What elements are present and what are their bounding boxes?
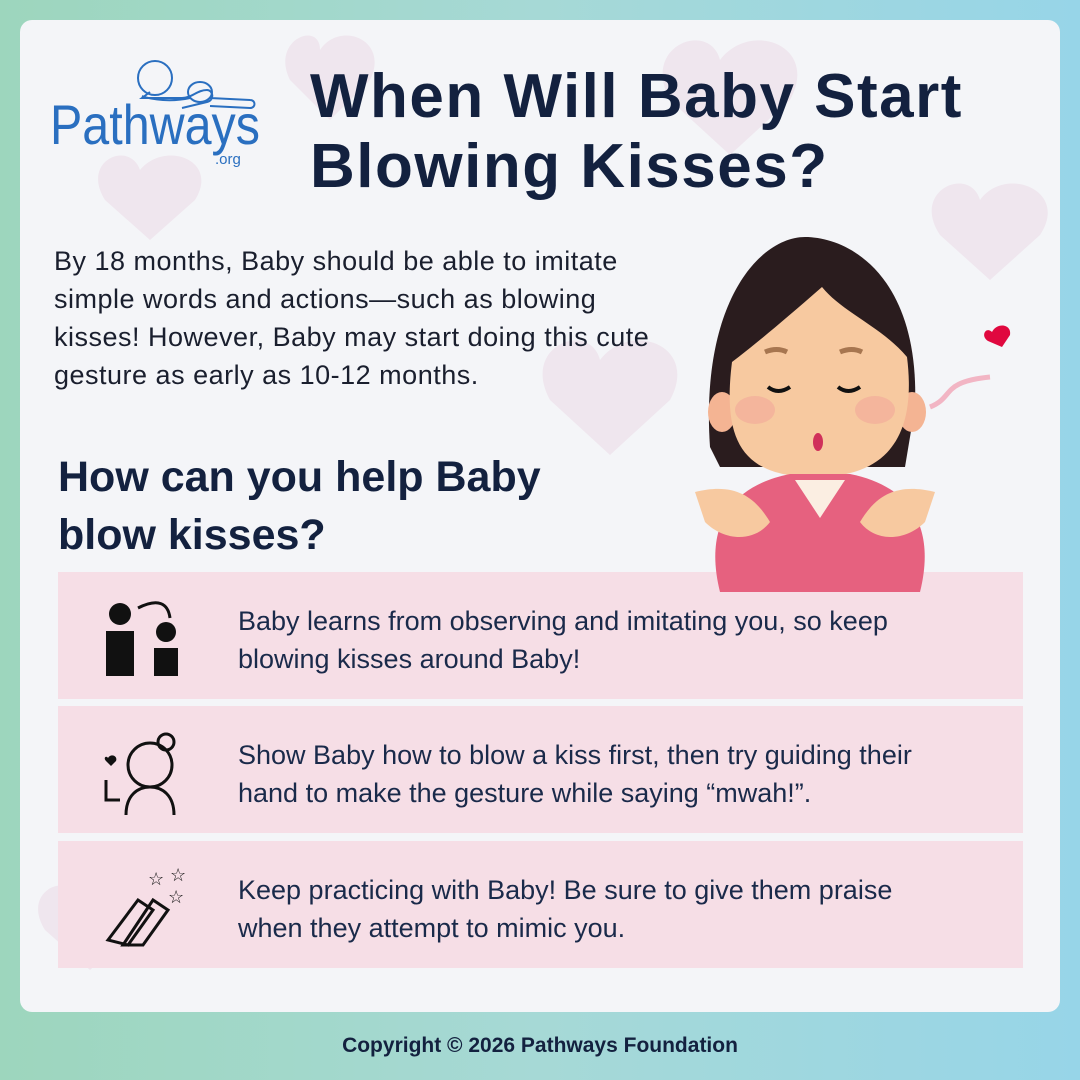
logo: Pathways.org bbox=[50, 60, 260, 168]
icon: imitation people bbox=[106, 601, 178, 676]
tip row 2: Show Baby how to blow a kiss first, then try guiding their hand to make the gesture while saying “mwah!”. bbox=[238, 740, 912, 808]
icon: person blowing kiss bbox=[104, 732, 176, 815]
subheading: blow kisses? bbox=[58, 511, 326, 559]
icon: clapping hands: ☆ bbox=[148, 869, 164, 889]
title: Blowing Kisses? bbox=[310, 132, 829, 201]
tip row 2 bbox=[58, 706, 1023, 833]
subheading bbox=[58, 453, 541, 559]
copyright footer: Copyright © 2026 Pathways Foundation bbox=[342, 1034, 738, 1057]
title: When Will Baby Start bbox=[310, 62, 963, 131]
subheading: How can you help Baby bbox=[58, 453, 541, 501]
tip row 1: Baby learns from observing and imitating you, so keep blowing kisses around Baby! bbox=[238, 606, 888, 674]
tip row 1 bbox=[58, 572, 1023, 699]
icon: clapping hands bbox=[106, 865, 186, 947]
illustration: girl blowing kiss bbox=[695, 237, 1010, 592]
icon: clapping hands: ☆ bbox=[170, 865, 186, 885]
tip row 3 bbox=[58, 841, 1023, 968]
title bbox=[310, 62, 963, 201]
icon: clapping hands: ☆ bbox=[168, 887, 184, 907]
logo: Pathways.org: .org bbox=[215, 151, 241, 168]
intro text: By 18 months, Baby should be able to imitate simple words and actions—such as blowing kisses! However, Baby may start doing this cute gesture as early as 10-12 months. bbox=[54, 246, 649, 390]
tip row 3: Keep practicing with Baby! Be sure to give them praise when they attempt to mimic you. bbox=[238, 875, 892, 943]
